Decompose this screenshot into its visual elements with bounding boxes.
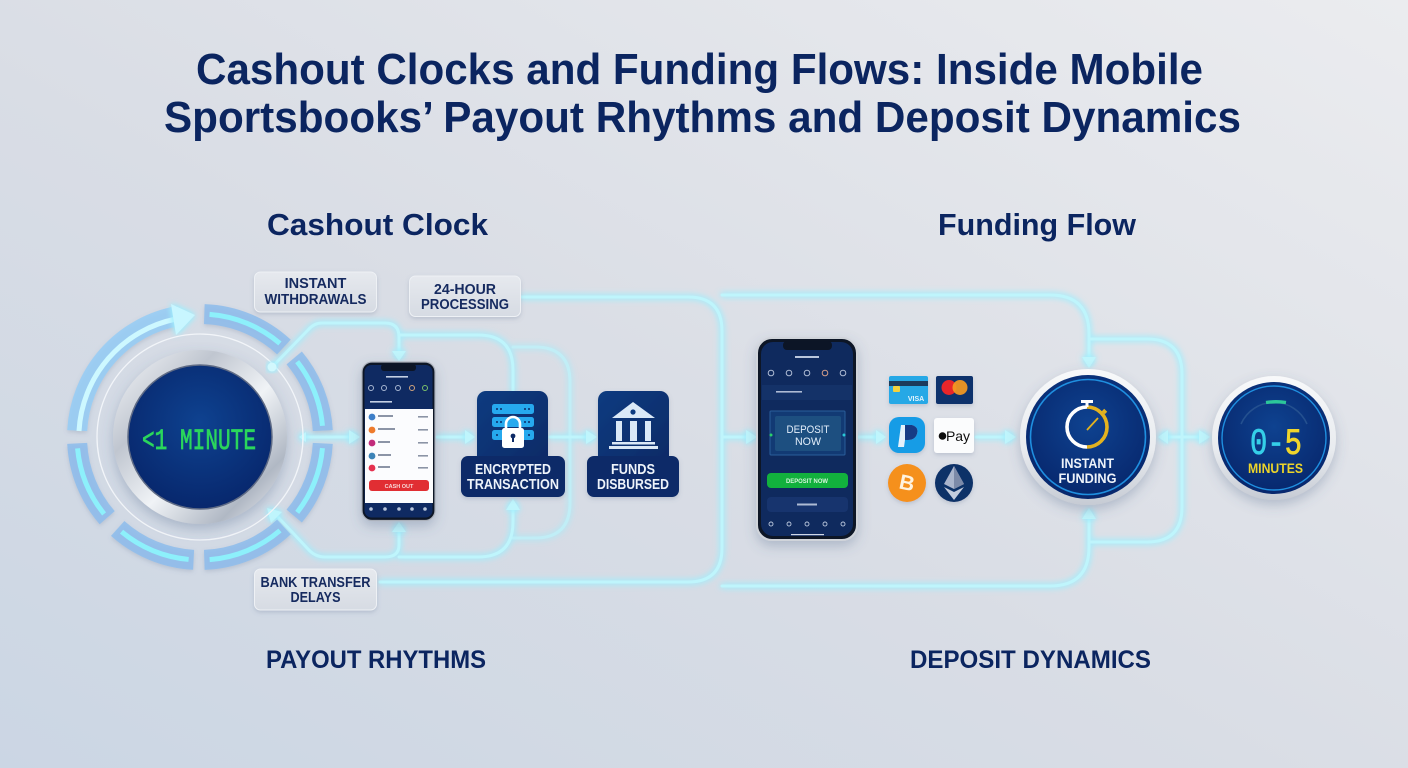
instant funding badge: INSTANT [1061,456,1115,471]
icon: bitcoin: B [897,471,917,496]
node dot [268,362,276,372]
label plate [461,456,565,497]
secondary button [767,497,848,512]
arrowheads [267,351,1210,532]
label: 24-hour processing: 24-HOUR [434,282,497,298]
icon: server with padlock [492,404,534,448]
metal bezel [113,350,287,524]
encrypted transaction tile: TRANSACTION [467,476,559,493]
bottom nav [769,522,845,526]
label: 24-hour processing [410,276,520,316]
phone: deposit app [757,338,857,540]
footer: payout rhythms: PAYOUT RHYTHMS [266,646,486,674]
dial readout: <1 MINUTE [142,425,256,459]
connector lines [272,295,1200,586]
icon: card: VISA [908,396,924,403]
icon: mastercard [936,376,973,404]
icon: paypal [889,417,925,453]
encrypted transaction tile: ENCRYPTED [475,461,551,478]
red cashout button [369,480,429,491]
label: bank transfer delays: DELAYS [290,590,341,606]
bottom nav [369,507,427,511]
label: bank transfer delays [254,569,376,610]
deposit panel [770,411,845,455]
dial face [128,365,272,509]
phone: withdrawals app: CASH OUT [385,484,414,490]
icon: stopwatch [1067,402,1107,447]
title [164,45,1241,142]
phone: deposit app: NOW [795,436,822,448]
green button [767,473,848,488]
footer: deposit dynamics: DEPOSIT DYNAMICS [910,646,1151,674]
clockwise arrowhead [171,304,195,335]
phone: withdrawals app [362,362,435,520]
label: instant withdrawals [254,272,376,312]
heading: Cashout Clock: Cashout Clock [267,207,489,242]
label: 24-hour processing: PROCESSING [421,297,509,313]
instant funding badge: FUNDING [1058,471,1116,486]
label: instant withdrawals: WITHDRAWALS [264,292,367,308]
label: instant withdrawals: INSTANT [285,276,347,292]
phone: deposit app: DEPOSIT NOW [786,478,829,485]
label plate [587,456,679,497]
icon: ethereum [935,464,973,502]
icon: bank [609,402,658,449]
label: bank transfer delays: BANK TRANSFER [260,575,371,591]
0-5 minutes badge: MINUTES [1248,460,1303,476]
title: Sportsbooks’ Payout Rhythms and Deposit Dynamics [164,93,1241,142]
funds disbursed tile [587,391,679,497]
app icons row [368,386,428,390]
ring segments [77,314,323,560]
funds disbursed tile: DISBURSED [597,476,669,493]
title: Cashout Clocks and Funding Flows: Inside Mobile [196,45,1203,94]
heading: Funding Flow: Funding Flow [938,207,1137,242]
funds disbursed tile: FUNDS [611,461,655,478]
transaction list [365,409,433,503]
icon: apple pay: Pay [946,428,970,444]
0-5 minutes badge [1212,376,1336,500]
encrypted transaction tile [461,391,565,497]
app icons row [768,370,846,376]
thin ring [97,334,303,540]
instant funding badge [1020,369,1156,505]
0-5 minutes badge: 0-5 [1250,424,1302,466]
phone: deposit app: DEPOSIT [786,424,830,436]
cashout clock dial [77,304,323,560]
payment methods [888,376,974,502]
